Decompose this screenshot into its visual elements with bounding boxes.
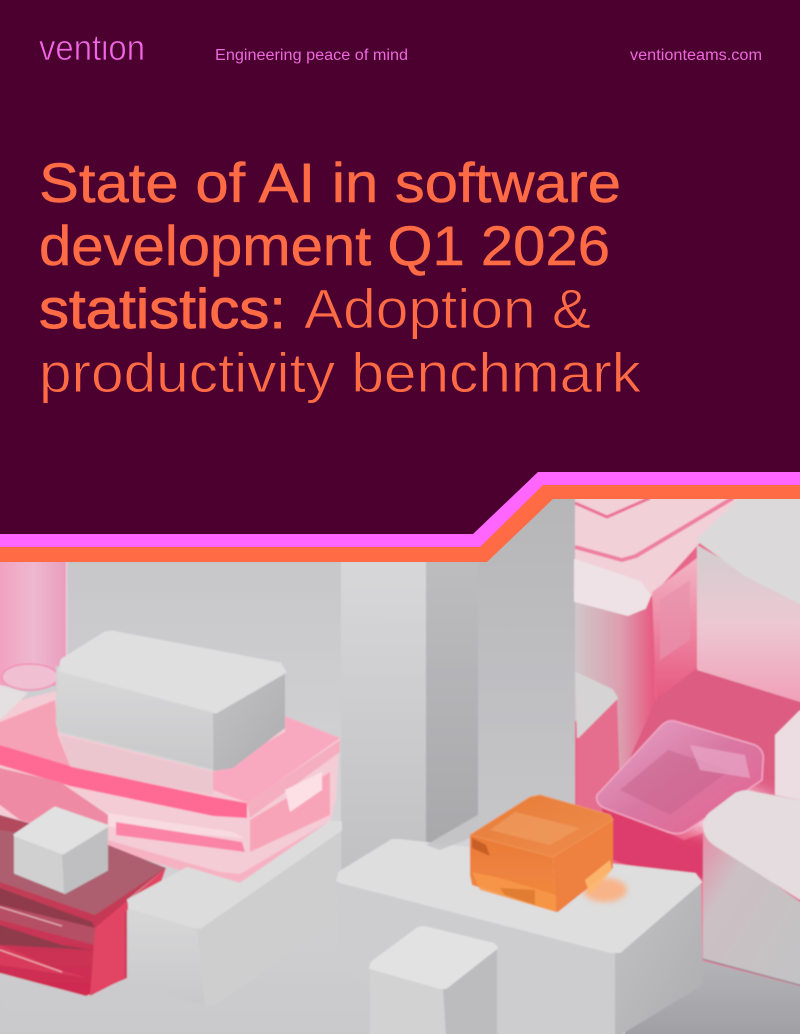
floor, right <box>618 959 800 1034</box>
right concrete block A <box>575 560 656 790</box>
white block corner, far left <box>0 685 28 720</box>
title: State of AI in software <box>39 151 621 214</box>
lower right concrete block <box>698 790 800 985</box>
glass column, top right <box>575 498 740 702</box>
right concrete block B <box>697 499 800 702</box>
title: Adoption & <box>304 277 591 340</box>
concrete pillar <box>341 550 478 880</box>
photo: 3D concrete blocks and glass <box>0 498 800 1034</box>
pink glass block <box>597 721 775 834</box>
title <box>39 151 642 404</box>
magenta band <box>0 472 800 547</box>
dark pink recess <box>630 670 800 794</box>
pink under glass <box>602 808 704 881</box>
logo: vention <box>39 27 145 68</box>
right small block <box>775 710 800 800</box>
large concrete block, back left <box>57 632 285 771</box>
long concrete block, bottom left <box>126 822 342 928</box>
website: ventionteams.com <box>630 47 762 64</box>
tagline: Engineering peace of mind <box>215 47 408 64</box>
central concrete base <box>337 815 703 1034</box>
orange glass cube <box>470 795 627 912</box>
small concrete cube, left <box>15 808 107 893</box>
orange band <box>0 484 800 562</box>
header and title panel <box>0 27 800 562</box>
small concrete block, front <box>370 927 497 1034</box>
title: statistics: <box>39 277 286 340</box>
title: development Q1 2026 <box>39 214 610 277</box>
glass cylinder <box>0 561 67 690</box>
right concrete block C <box>576 672 620 778</box>
right side pink background <box>574 542 800 986</box>
title: productivity benchmark <box>39 341 642 404</box>
grey wall panel <box>478 498 576 838</box>
red glass stack <box>0 815 166 996</box>
glass plate stack, left <box>0 685 340 884</box>
